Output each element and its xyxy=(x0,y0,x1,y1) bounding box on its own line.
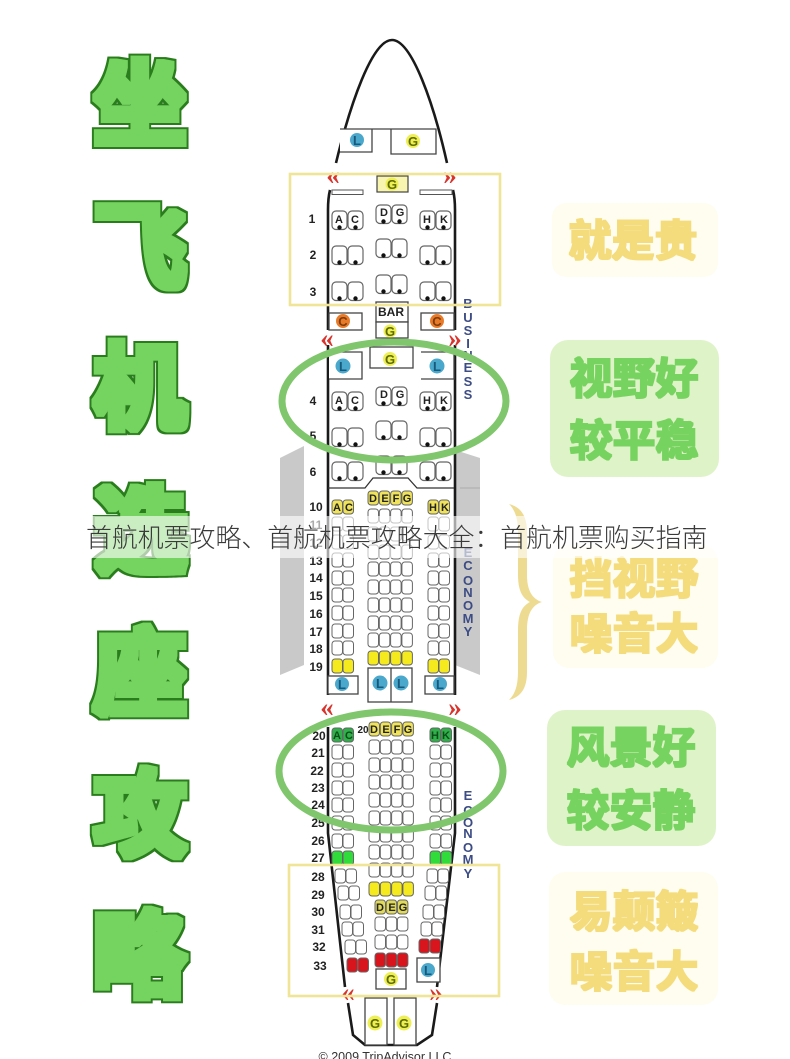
row numbers: 20 xyxy=(312,729,326,743)
panel: expensive xyxy=(552,203,718,277)
rear galleys and lavatory: G xyxy=(386,972,396,987)
panel: blocked view, noisy: 挡视野 xyxy=(570,545,698,607)
panel: bumpy, noisy: 易颠簸 xyxy=(570,878,698,940)
row numbers: 23 xyxy=(311,781,325,795)
vertical label: economy lower: N xyxy=(463,826,473,841)
row numbers: 5 xyxy=(310,429,317,443)
row numbers: 19 xyxy=(309,660,323,674)
row numbers: 33 xyxy=(313,959,327,973)
economy cabin seats: rows 20 to 33: G xyxy=(399,902,407,914)
forward cabin fixtures: C xyxy=(432,314,442,329)
row numbers: 32 xyxy=(312,940,326,954)
door markers xyxy=(320,160,462,1007)
economy cabin seats: rows 20 to 33: C xyxy=(345,730,353,742)
row numbers: 25 xyxy=(311,816,325,830)
business class seats: G xyxy=(396,207,404,219)
vertical label: economy lower: C xyxy=(463,803,473,818)
rear galleys and lavatory: G xyxy=(399,1016,409,1031)
vertical label: business: E xyxy=(464,360,473,375)
title: vertical heading: 选 xyxy=(94,456,188,592)
panel: bumpy, noisy xyxy=(549,872,718,1005)
row numbers: 22 xyxy=(310,764,324,778)
economy cabin seats: rows 10 to 19: H xyxy=(429,502,437,514)
door markers: « xyxy=(341,977,355,1007)
rear galleys and lavatory xyxy=(365,958,440,1045)
forward cabin fixtures: G xyxy=(387,177,397,192)
vertical label: economy upper: M xyxy=(463,611,473,626)
vertical label: economy upper: Y xyxy=(464,624,473,639)
row numbers: 13 xyxy=(309,554,323,568)
vertical label: business: N xyxy=(463,348,473,363)
row numbers: 11 xyxy=(310,518,323,532)
door markers: » xyxy=(448,692,462,722)
title: vertical heading xyxy=(92,30,188,1017)
economy cabin seats: rows 20 to 33: 20 xyxy=(357,725,369,736)
forward cabin fixtures: G xyxy=(385,352,395,367)
panel: nice scenery, quiet: 风景好 xyxy=(566,714,696,776)
vertical label: business: S xyxy=(464,374,473,389)
economy cabin seats: rows 10 to 19: E xyxy=(381,493,389,505)
caption text: 首航机票攻略、首航机票攻略大全：首航机票购买指南 xyxy=(86,525,707,553)
mid lavatories: L xyxy=(338,677,346,692)
row numbers: 3 xyxy=(310,285,317,299)
vertical label: business xyxy=(463,296,473,402)
door markers: » xyxy=(429,977,443,1007)
economy cabin seats: rows 20 to 33: F xyxy=(394,724,401,736)
business class seats xyxy=(332,205,451,481)
business class seats: D xyxy=(380,207,388,219)
vertical label: economy upper: C xyxy=(463,558,473,573)
vertical label: business: I xyxy=(466,336,470,351)
economy cabin seats: rows 20 to 33: E xyxy=(382,724,390,736)
row numbers xyxy=(309,212,327,973)
wings xyxy=(280,446,480,675)
vertical label: economy upper: E xyxy=(464,545,473,560)
mid lavatories: L xyxy=(436,677,444,692)
row numbers: 27 xyxy=(311,851,325,865)
panel: nice scenery, quiet xyxy=(547,710,716,846)
economy cabin seats: rows 20 to 33: K xyxy=(442,730,450,742)
vertical label: business: S xyxy=(464,323,473,338)
vertical label: economy upper: O xyxy=(463,598,473,613)
economy cabin seats: rows 10 to 19: K xyxy=(441,502,449,514)
row numbers: 28 xyxy=(311,870,325,884)
mid lavatories: L xyxy=(397,676,405,691)
economy cabin seats: rows 20 to 33: A xyxy=(333,730,341,742)
business class seats: H xyxy=(423,214,431,226)
vertical label: economy lower: M xyxy=(463,852,473,867)
icon: galley: G xyxy=(408,134,418,149)
vertical label: economy upper xyxy=(463,545,473,639)
highlight: mid ellipse xyxy=(279,712,503,830)
highlight: first class zone xyxy=(290,174,500,305)
rear galleys and lavatory: L xyxy=(424,963,432,978)
panel: nice scenery, quiet: 较安静 xyxy=(566,777,696,839)
business class seats: A xyxy=(335,214,343,226)
row numbers: 30 xyxy=(311,905,325,919)
title: vertical heading: 攻 xyxy=(93,740,187,876)
row numbers: 14 xyxy=(309,571,323,585)
door markers: » xyxy=(443,160,457,190)
business class seats: K xyxy=(440,214,448,226)
row numbers: 12 xyxy=(309,536,323,550)
title: vertical heading: 机 xyxy=(93,313,187,449)
business class seats: C xyxy=(351,214,359,226)
rear galleys and lavatory: G xyxy=(370,1016,380,1031)
forward cabin fixtures: BAR xyxy=(378,305,404,319)
row numbers: 29 xyxy=(311,888,325,902)
title: vertical heading: 略 xyxy=(92,881,186,1017)
panel: blocked view, noisy xyxy=(553,545,718,668)
vertical label: business: B xyxy=(463,296,473,311)
vertical label: economy lower: O xyxy=(463,840,473,855)
title: vertical heading: 飞 xyxy=(93,173,187,309)
aircraft fuselage outline xyxy=(328,40,455,1045)
mid lavatories: L xyxy=(376,676,384,691)
economy cabin seats: rows 10 to 19: G xyxy=(403,493,411,505)
forward cabin fixtures xyxy=(329,176,454,379)
front galley and lavatory xyxy=(340,129,436,154)
vertical label: economy upper: N xyxy=(463,585,473,600)
row numbers: 26 xyxy=(311,834,325,848)
vertical label: economy lower: Y xyxy=(464,866,473,881)
row numbers: 4 xyxy=(310,394,317,408)
highlight: forward ellipse xyxy=(282,342,506,460)
economy cabin seats: rows 20 to 33 xyxy=(332,722,452,972)
row numbers: 31 xyxy=(311,923,325,937)
panel: blocked view, noisy: 噪音大 xyxy=(570,600,698,662)
door markers: « xyxy=(320,323,334,353)
icon: lavatory: L xyxy=(353,133,361,148)
row numbers: 21 xyxy=(311,746,325,760)
economy cabin seats: rows 20 to 33: H xyxy=(431,730,439,742)
economy cabin seats: rows 20 to 33: E xyxy=(388,902,396,914)
row numbers: 1 xyxy=(309,212,316,226)
vertical label: economy lower: O xyxy=(463,815,473,830)
economy cabin seats: rows 10 to 19 xyxy=(332,491,450,673)
economy cabin seats: rows 20 to 33: D xyxy=(370,724,378,736)
economy cabin seats: rows 10 to 19: C xyxy=(345,502,353,514)
vertical label: economy upper: O xyxy=(463,573,473,588)
row numbers: 6 xyxy=(310,465,317,479)
economy cabin seats: rows 10 to 19: A xyxy=(333,502,341,514)
vertical label: economy lower: E xyxy=(464,788,473,803)
row numbers: 17 xyxy=(309,625,323,639)
economy cabin seats: rows 20 to 33: D xyxy=(376,902,384,914)
title: vertical heading: 座 xyxy=(93,599,187,735)
caption band xyxy=(0,516,790,558)
highlight: rear zone xyxy=(289,865,499,996)
forward cabin fixtures: L xyxy=(339,359,347,374)
title: vertical heading: 坐 xyxy=(93,30,187,166)
vertical label: economy lower xyxy=(463,788,473,881)
economy cabin seats: rows 20 to 33: G xyxy=(404,724,412,736)
row numbers: 16 xyxy=(309,607,323,621)
mid lavatories xyxy=(328,668,454,702)
row numbers: 2 xyxy=(310,248,317,262)
panel: expensive: 就是贵 xyxy=(568,207,698,269)
door markers: « xyxy=(320,692,334,722)
forward cabin fixtures: L xyxy=(433,359,441,374)
panel: good view, steady: 较平稳 xyxy=(570,407,698,469)
economy cabin seats: rows 10 to 19: F xyxy=(393,493,400,505)
economy cabin seats: rows 10 to 19: D xyxy=(369,493,377,505)
business class seats: C xyxy=(351,395,359,407)
door markers: » xyxy=(448,323,462,353)
row numbers: 24 xyxy=(311,798,325,812)
vertical label: business: U xyxy=(463,310,473,325)
row numbers: 10 xyxy=(309,500,323,514)
business class seats: K xyxy=(440,395,448,407)
panel: good view, steady xyxy=(550,340,719,477)
business class seats: D xyxy=(380,389,388,401)
forward cabin fixtures: G xyxy=(385,324,395,339)
business class seats: H xyxy=(423,395,431,407)
business class seats: A xyxy=(335,395,343,407)
panel: good view, steady: 视野好 xyxy=(570,345,698,407)
row numbers: 18 xyxy=(309,642,323,656)
vertical label: business: S xyxy=(464,387,473,402)
forward cabin fixtures: C xyxy=(338,314,348,329)
panel: bumpy, noisy: 噪音大 xyxy=(570,938,698,1000)
row numbers: 15 xyxy=(309,589,323,603)
bracket xyxy=(509,504,542,700)
door markers: « xyxy=(326,160,340,190)
business class seats: G xyxy=(396,389,404,401)
